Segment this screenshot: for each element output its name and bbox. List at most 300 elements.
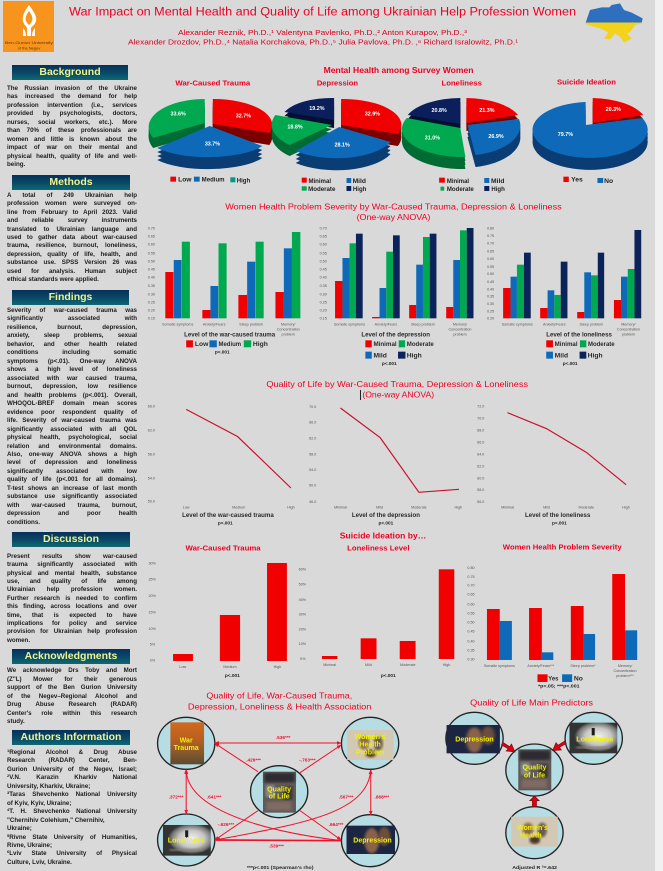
line chart: quality of life by depression: 62.0 [309,437,316,441]
predictor node labels: Depression [455,736,494,743]
bar chart: health problems by loneliness [487,227,641,366]
bar chart: health problems by depression: Concentration [449,328,472,332]
bar chart: health problems by loneliness: Somatic symptoms [502,323,533,327]
bar chart: health problems by depression: 0.15 [320,317,327,321]
line chart: quality of life by loneliness: p<.001 [552,521,567,526]
bar chart: suicide ideation by health problem severity [467,542,637,689]
text block: Findings: substance use significantly associated [7,493,137,500]
bar chart: suicide ideation by health problem severity: 0.60 [467,603,475,607]
bar chart: suicide ideation by war-caused trauma: Low [179,665,187,669]
section heading: health problem severity: (One-way ANOVA) [357,212,430,222]
bar chart: health problems by depression: problem [453,333,467,337]
text block: Methods: ethical standards were applied. [7,276,99,283]
text block: Findings: burnout, depression, low resilience [7,383,137,390]
text block: Acknowledgments: of the Negev–Regional Alcohol and [7,692,137,700]
text block: Background: impact of war on their mental and [7,144,137,151]
line chart: quality of life by loneliness [477,404,630,526]
bar chart: health problems by loneliness: Minimal [555,341,578,348]
icon: Ukraine map in flag colours [586,3,643,43]
pie headings, value labels and legends: 19.2% [309,106,325,112]
section heading: health problem severity [225,202,562,222]
bar chart: health problems by war-caused trauma: 0.45 [148,268,155,272]
text block: Findings: with war-caused trauma, burnout, [7,502,137,509]
predictor node labels: Health [520,832,542,839]
text block: Methods: used for analysis. Human subject [7,268,137,275]
bar chart: health problems by war-caused trauma: 0.30 [148,293,155,297]
text block: Findings: level of depression and loneliness [7,459,137,466]
heading: Findings: Findings [49,291,92,303]
text block: Background: profession intervention (i.e., services [7,102,137,109]
predictor node labels: Quality [522,765,546,772]
bar chart: suicide ideation by health problem severity: 0.70 [467,584,475,588]
bar chart: health problems by depression: 0.55 [320,252,327,256]
text block: Findings: WHOQOL-BREF domain mean scores [7,400,137,407]
text block: Discussion: time, that is expected to have [7,612,137,619]
bar chart: suicide ideation by health problem severity: 0.40 [467,640,475,644]
line chart: quality of life by loneliness: Level of the loneliness [525,512,591,519]
bar chart: suicide ideation by health problem severity: problem*** [616,674,634,678]
bar chart: suicide ideation by loneliness level: 40% [299,598,307,602]
pie headings, value labels and legends: High [491,186,505,193]
section heading: quality of life [266,379,529,400]
text block: Findings: significantly associated with low [7,468,137,475]
authors: Alexander Reznik, Ph.D.,¹ Valentyna Pavlenko, Ph.D.,² Anton Kurapov, Ph.D.,³ [178,28,468,37]
line chart: quality of life by war-caused trauma [148,404,295,526]
text block: Methods: translated to Ukrainian language and [7,226,137,233]
line chart: quality of life by depression: High [455,506,462,510]
section heading: mental health: Mental Health among Survey Women [324,65,473,75]
text block: Acknowledgments: Drug Abuse Research (RADAR) [7,701,137,708]
line chart: quality of life by depression: Level of the depression [352,512,420,519]
bar chart: suicide ideation by war-caused trauma: 10% [148,627,157,631]
pie headings, value labels and legends: 28.1% [334,142,350,148]
heading: Background: Background [39,66,101,78]
bar chart: suicide ideation by war-caused trauma: High [274,665,281,669]
association coefficients: -.626*** [218,822,234,827]
bar chart: health problems by loneliness: 0.20 [487,317,494,321]
section heading: quality of life: (One-way ANOVA) [362,389,434,399]
text block: Background: than 70% of these professionals are [7,127,137,134]
bar chart: suicide ideation by loneliness level: 50% [299,583,307,587]
line chart: quality of life by war-caused trauma: 66.0 [148,404,155,408]
bar chart: health problems by war-caused trauma: 0.20 [148,308,155,312]
bar chart: health problems by war-caused trauma: 0.40 [148,276,155,280]
bar chart: health problems by loneliness: problem [622,333,635,337]
association diagram: quality of life, trauma, depression, loneliness, health [158,691,399,870]
association lines [186,743,371,841]
predictor footnote: Adjusted R ²=.642 [512,865,557,870]
logo: Ben-Gurion University [3,1,54,52]
predictor heading: Quality of Life Main Predictors [470,698,594,708]
bar chart: suicide ideation by loneliness level: High [443,663,450,667]
bar chart: health problems by depression: 0.65 [320,234,327,238]
bar chart: health problems by war-caused trauma: Memory/ [281,323,296,327]
text block: Findings: anxiety, sleep problems, sexual [7,332,137,339]
text block: Background: nurses, social workers, etc.). More [7,119,137,126]
authors: Alexander Drozdov, Ph.D.,⁴ Natalia Korchakova, Ph.D.,⁵ Julia Pavlova, Ph.D. ,⁶ Richard Isralowitz, Ph.D.¹ [128,37,519,46]
association coefficients: .536*** [276,735,291,740]
bar chart: health problems by war-caused trauma: 0.50 [148,260,155,264]
bar chart: health problems by war-caused trauma: 0.15 [148,317,155,321]
line chart: quality of life by war-caused trauma: Low [183,506,190,510]
bar chart: health problems by war-caused trauma: 0.65 [148,234,155,238]
pie: suicide ideation [533,98,648,170]
bar chart: health problems by depression: Memory/ [453,323,468,327]
bar chart: health problems by loneliness: High [588,352,603,359]
pie headings, value labels and legends: 20.8% [431,108,447,114]
association node labels: Problem [356,749,384,756]
association photos [163,722,395,856]
bar chart: suicide ideation by loneliness level: 60% [299,568,307,572]
bar chart: health problems by loneliness: Memory/ [621,323,637,327]
pie headings, value labels and legends: 32.7% [236,113,251,119]
predictor arrows [501,741,566,807]
association coefficients: .426*** [246,758,261,763]
text block: Findings: significantly associated with [7,315,137,322]
bar chart: suicide ideation by loneliness level: Mild [365,663,372,667]
text block: Methods: line from February to April 2023. Valid [7,209,137,216]
logo: Ben-Gurion University: of the Negev [18,46,40,50]
bar chart: health problems by loneliness: Mild [555,352,568,359]
bar chart: suicide ideation by health problem severity: 0.35 [467,648,475,652]
association heading: Depression, Loneliness & Health Association [188,702,372,712]
bar chart: health problems by depression: Anxiety/Fears [375,323,397,327]
text block: Discussion: provision for Ukrainian help profession [7,628,137,635]
bar chart: health problems by loneliness: 0.50 [487,272,494,276]
bar chart: health problems by loneliness: p<.001 [563,361,578,366]
pie headings, value labels and legends: 21.3% [479,108,495,114]
pie headings, value labels and legends: 31.0% [425,136,440,142]
bar chart: suicide ideation by health problem severity: *p<.05; ***p<.001 [538,684,580,689]
pie headings, value labels and legends: Suicide Ideation [557,77,616,86]
predictor node labels: Loneliness [576,736,613,743]
predictor photos [447,723,617,847]
bar chart: suicide ideation by loneliness level: p<.001 [381,673,396,678]
bar chart: health problems by war-caused trauma [148,227,300,354]
bar chart: health problems by depression: 0.45 [320,268,327,272]
line chart: quality of life by loneliness: 58.0 [477,488,484,492]
pie headings, value labels and legends: 20.3% [606,107,621,113]
text block: Findings: Severity of war-caused trauma was [7,307,137,314]
bar chart: health problems by war-caused trauma: 0.70 [148,227,155,231]
text block: Background: provided by psychologists, doctors, [7,110,137,117]
title: War Impact on Mental Health and Quality of Life among Ukrainian Help Profession Women [69,6,576,18]
association node labels [168,734,392,844]
text block: Acknowledgments [7,667,137,725]
text block: Background: The Russian invasion of the Ukraine [7,85,137,92]
association coefficients: .539*** [269,843,284,848]
line chart: quality of life by depression: Moderate [411,506,427,510]
association coefficients: -.763*** [299,758,316,763]
text block: Background [7,85,137,168]
bar chart: suicide ideation by war-caused trauma [148,543,287,678]
line chart: quality of life by war-caused trauma: 54.0 [148,477,155,481]
association node labels: Quality [267,786,291,793]
bar chart: suicide ideation by health problem severity: Concentration [614,669,637,673]
pie headings, value labels and legends: Minimal [447,178,469,185]
text block: Findings: associated with war caused trauma, [7,375,137,382]
text block: Background: has increased the demand for help [7,93,137,100]
bar chart: health problems by depression: 0.25 [320,301,327,305]
bar chart: health problems by loneliness: 0.55 [487,265,494,269]
bar chart: suicide ideation by war-caused trauma: 0% [150,659,156,663]
bar chart: health problems by war-caused trauma: problem [282,333,295,337]
bar chart: health problems by depression: Level of the depression [361,331,430,338]
bar chart: suicide ideation by health problem severity: 0.55 [467,612,475,616]
bar chart: health problems by war-caused trauma: Level of the war-caused trauma [184,331,275,338]
text block: Background: women and little is known about the [7,136,137,143]
text block: Background: being. [7,161,25,168]
pie headings, value labels and legends: War-Caused Trauma [175,78,251,87]
bar chart: health problems by loneliness: Level of the loneliness [546,331,612,338]
pie headings, value labels and legends: No [604,178,613,185]
text block: Findings: symptoms (p<.01). One-way ANOVA [7,358,137,365]
pie headings, value labels and legends: 18.8% [287,125,303,131]
text block: Acknowledgments: (Z"L) Mower for their generous [7,676,137,682]
line chart: quality of life by war-caused trauma: 58.0 [148,453,155,457]
heading: Findings [12,290,129,305]
bar chart: health problems by loneliness: 0.70 [487,242,494,246]
text block: Findings: behavior, and other health related [7,341,137,348]
bar chart: suicide ideation by war-caused trauma: 20% [148,594,157,598]
bar chart: health problems by depression: Somatic symptoms [334,323,365,327]
association node labels: Health [359,742,381,749]
bar chart: suicide ideation by loneliness level: Minimal [323,663,336,667]
bar chart: health problems by war-caused trauma: High [253,341,268,348]
bar chart: health problems by war-caused trauma: Anxiety/Fears [203,323,226,327]
bar chart: health problems by depression: 0.20 [320,308,327,312]
line chart: quality of life by loneliness: High [622,506,630,510]
bar chart: health problems by depression: 0.35 [320,284,327,288]
pie headings, value labels and legends: Loneliness [441,78,482,87]
pie headings, value labels and legends: 32.9% [365,112,380,118]
predictor circles [446,712,622,859]
pie headings, value labels and legends: Yes [571,177,583,184]
text block: Acknowledgments: We acknowledge Drs Toby and Mort [7,667,137,674]
predictor node labels: of Life [524,772,545,779]
bar chart: health problems by war-caused trauma: p<.001 [215,349,230,354]
text block: Findings: and health problems (p<.001). Overall, [7,392,137,399]
text block: Acknowledgments: study. [7,718,25,725]
line chart: quality of life by depression [309,405,462,526]
text block: Authors Information: Ukraine; [7,825,32,832]
bar chart: health problems by depression: Mild [373,352,387,359]
text block: Authors Information: Rivne, Ukraine; [7,842,52,849]
bar chart: health problems by war-caused trauma: Concentration [277,328,300,332]
bar chart: health problems by depression: Sleep problem [411,323,435,327]
text block: Background: physical health, quality of life and well- [7,152,137,160]
association coefficients: .641*** [207,794,222,799]
pie headings, value labels and legends: Minimal [308,178,331,185]
bar chart: health problems by depression: Minimal [373,341,397,348]
line chart: quality of life by depression: 46.0 [309,500,316,504]
logo: Ben-Gurion University: Ben-Gurion University [5,40,53,45]
bar chart: suicide ideation by health problem severity: 0.80 [467,566,475,570]
text block: Findings: conditions. [7,519,40,526]
text block: Findings: Also, one-way ANOVA shows a high [7,451,137,458]
section heading: quality of life: Quality of Life by War-Caused Trauma, Depression & Loneliness [266,379,529,389]
pie headings, value labels and legends [170,77,621,193]
text block: Authors Information [7,749,137,866]
line chart: quality of life by war-caused trauma: Medium [232,506,245,510]
line chart: quality of life by loneliness: Moderate [579,506,594,510]
pie: war-caused trauma [149,99,272,169]
text block: Findings: significantly associated with all QOL [7,426,137,433]
line chart: quality of life by depression: 66.0 [309,421,316,425]
line chart: quality of life by depression: 50.0 [309,484,316,488]
association node labels: Trauma [174,745,199,752]
bar chart: suicide ideation by health problem severity: 0.75 [467,575,475,579]
text block: Methods: profession women were surveyed on- [7,200,137,207]
pie: depression [272,98,401,170]
bar chart: suicide ideation by health problem severity: 0.50 [467,621,475,625]
line chart: quality of life by war-caused trauma: 62.0 [148,429,155,433]
text block: Findings: physical health, psychological, social [7,434,137,441]
bar chart: health problems by war-caused trauma: 0.60 [148,243,155,247]
bar chart: health problems by loneliness: 0.25 [487,310,494,314]
predictor node labels: Women's [517,825,548,832]
text block: Discussion [7,553,137,644]
association coefficients: .372*** [169,794,184,799]
text block: Discussion: Further research is needed to confirm [7,595,137,602]
bar chart: suicide ideation by war-caused trauma: War-Caused Trauma [186,543,261,552]
text block: Methods: trauma, resilience, burnout, loneliness, [7,242,137,249]
association heading [188,691,372,712]
bar chart: health problems by depression: 0.30 [320,293,327,297]
text block: Discussion: trauma significantly associated with [7,561,137,568]
text block: Findings: life. Severity of war-caused trauma was [7,417,137,424]
bar chart: health problems by loneliness: 0.35 [487,295,494,299]
bar chart: health problems by depression: p<.001 [382,361,397,366]
line chart: quality of life by loneliness: 72.0 [477,404,484,408]
heading: Authors Information: Authors Information [21,731,121,743]
line chart: quality of life by loneliness: 62.0 [477,465,484,469]
text block: Methods [7,192,137,283]
bar chart: health problems by war-caused trauma: 0.35 [148,284,155,288]
section heading: health problem severity: Women Health Problem Severity by War-Caused Trauma, Depression & Loneliness [225,202,562,212]
bar chart: suicide ideation by loneliness level: 10% [299,642,307,646]
heading: Acknowledgments [12,649,130,664]
bar chart: suicide ideation by health problem severity: 0.45 [467,630,475,634]
text block: Findings: resilience, burnout, depression, [7,324,137,331]
bar chart: health problems by depression: High [407,352,422,359]
text block: Discussion: women. [7,637,30,644]
heading: Discussion: Discussion [43,533,99,545]
pie headings, value labels and legends: Low [178,177,192,184]
bar chart: suicide ideation by health problem severity: Sleep problem* [570,664,596,668]
bar chart: health problems by depression: 0.70 [320,227,327,231]
association node labels: of Life [269,793,290,800]
line chart: quality of life by loneliness: Minimal [501,506,514,510]
heading: Methods [12,175,130,190]
bar chart: suicide ideation by loneliness level: 0% [300,657,306,661]
bar chart: health problems by loneliness: 0.75 [487,234,494,238]
bar chart: health problems by loneliness: Concentration [617,328,640,332]
association coefficients: .868*** [375,794,389,799]
pie headings, value labels and legends: High [353,186,366,193]
text block: Authors Information: of Kyiv, Kyiv, Ukraine; [7,800,71,807]
bar chart: suicide ideation by war-caused trauma: 15% [148,611,157,615]
bar chart: suicide ideation by health problem severity: Women Health Problem Severity [503,542,622,551]
bar chart: suicide ideation by loneliness level: 20% [299,628,307,632]
line chart: quality of life by depression: 58.0 [309,453,316,457]
bar chart: suicide ideation by health problem severity: Anxiety/Fears*** [527,664,555,668]
text block: Authors Information: "Chernihiv Colehium," Chernihiv, [7,817,105,824]
association heading: Quality of Life, War-Caused Trauma, [206,691,352,701]
bar chart: health problems by war-caused trauma: Somatic symptoms [162,323,194,327]
text block: Discussion: implications for policy and service [7,620,137,627]
line chart: quality of life by loneliness: Mild [543,506,550,510]
bar chart: suicide ideation by health problem severity: Yes [548,675,559,682]
heading: Discussion [12,532,130,547]
bar chart: health problems by depression: 0.60 [320,243,327,247]
text block: Acknowledgments: support of the Ben Gurion University [7,684,137,691]
section heading: suicide ideation: Suicide Ideation by… [340,531,426,541]
pie headings, value labels and legends: Depression [317,78,358,87]
pie headings, value labels and legends: Medium [202,177,225,184]
pie headings, value labels and legends: 79.7% [558,132,573,138]
pie headings, value labels and legends: Moderate [447,186,474,193]
text block: Findings: quality of life (p<.001 for all domains). [7,476,137,483]
line chart: quality of life by loneliness: 60.0 [477,477,484,481]
bar chart: health problems by loneliness: Anxiety/Fears [543,323,566,327]
bar chart: health problems by war-caused trauma: Sleep problem [239,323,263,327]
line chart: quality of life by loneliness: 68.0 [477,429,484,433]
pie headings, value labels and legends: Mild [491,178,504,185]
bar chart: health problems by loneliness: 0.45 [487,280,494,284]
bar chart: suicide ideation by war-caused trauma: 30% [148,562,157,566]
text block: Discussion: Ukrainian help profession women. [7,586,137,593]
line chart: quality of life by war-caused trauma: p<.001 [218,521,233,526]
bar chart: health problems by loneliness: Moderate [588,341,615,348]
predictor node labels [455,736,613,839]
pie headings, value labels and legends: Mild [353,178,366,185]
text block: Methods: and reliable survey instruments [7,217,137,224]
text block: Methods: used to gather data about war-caused [7,234,137,241]
text block: Authors Information: Culture, Lviv, Ukraine. [7,859,72,866]
text block: Methods: depression, quality of life, health, and [7,251,137,258]
bar chart: health problems by war-caused trauma: 0.25 [148,301,155,305]
bar chart: health problems by depression [320,227,473,366]
bar chart: health problems by depression: 0.40 [320,276,327,280]
line chart: quality of life by depression: p<.001 [379,521,394,526]
bar chart: health problems by loneliness: 0.60 [487,257,494,261]
text block: Methods: substance use. SPSS Version 26 was [7,259,137,266]
text block: Findings [7,307,137,526]
line chart: quality of life by war-caused trauma: High [287,506,295,510]
bar chart: suicide ideation by health problem severity: 0.30 [467,657,475,661]
association coefficients [169,735,389,848]
text block: Methods: A total of 249 Ukrainian help [7,192,137,199]
association node labels: Depression [353,837,392,844]
association circles [158,717,399,867]
line chart: quality of life by depression: Minimal [334,506,347,510]
text block: Findings: conditions including somatic [7,349,137,356]
text block: Findings: depression and poor health [7,510,137,517]
bar chart: suicide ideation by loneliness level: Moderate [400,663,416,667]
bar chart: suicide ideation by war-caused trauma: Medium [223,665,237,669]
authors [128,28,519,46]
heading: Authors Information [12,730,130,745]
text block: Discussion: Present results show war-caused [7,553,137,560]
bar chart: suicide ideation by war-caused trauma: p<.001 [225,673,240,678]
bar chart: health problems by war-caused trauma: 0.55 [148,252,155,256]
bar chart: health problems by loneliness: 0.80 [487,227,494,231]
text block: Findings: evidence poor respondent quality of [7,409,137,416]
text block: Findings: relation and environmental domains. [7,442,137,450]
text block: Authors Information: University, Kharkiv, Ukraine; [7,783,90,790]
bar chart: suicide ideation by health problem severity: 0.65 [467,593,475,597]
